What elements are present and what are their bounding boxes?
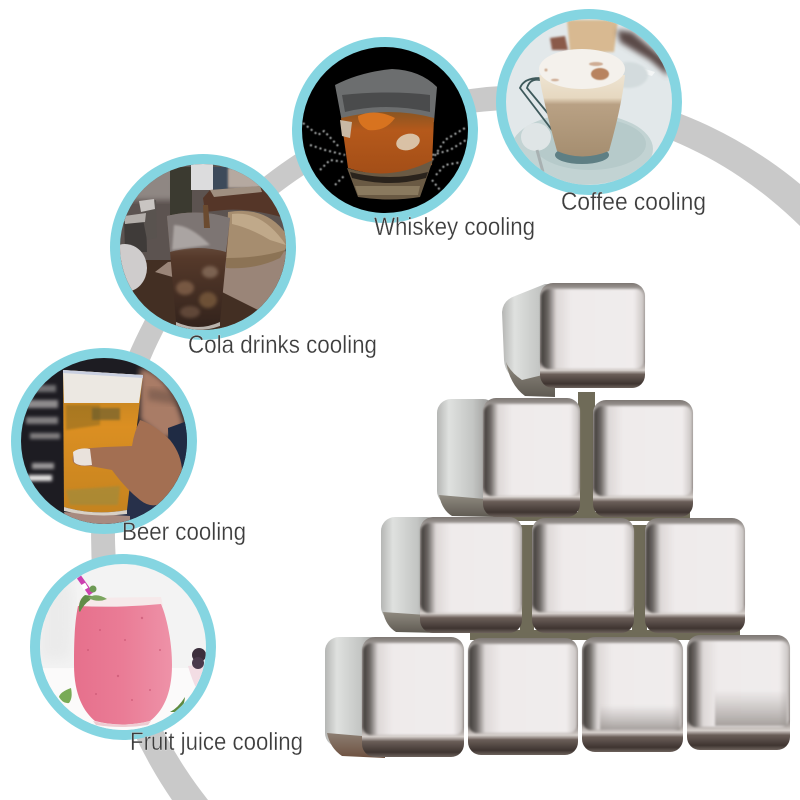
cube row 3 right [645,518,745,633]
cola glass [167,212,230,327]
photo circle: cola drinks [103,154,300,340]
background cup and items [567,20,618,52]
cup handle [520,78,555,130]
pouring bottle [203,186,280,217]
cube row 3 left [381,517,522,633]
cube row 3 middle [532,518,634,633]
pyramid of stainless steel cubes [325,283,790,758]
glass rim [78,597,163,606]
table surface [155,251,286,310]
grey connecting arc [91,85,800,800]
straw and mint [79,577,91,594]
blurred bar lights [26,385,60,481]
photo circle: whiskey [292,37,478,223]
beer glass [63,370,143,512]
man's face [140,368,184,440]
whiskey liquid [341,112,434,174]
glass upper [335,69,437,122]
salt and pepper shakers [124,214,147,252]
photo circle: beer [10,348,200,540]
cube row 2 left [437,398,580,517]
cube row 2 right [593,400,693,517]
glass badge [396,134,420,150]
label: whiskey cooling: Whiskey cooling [374,213,535,241]
label: coffee cooling: Coffee cooling [561,188,706,216]
bottles in background [170,167,192,215]
label: beer cooling: Beer cooling [122,518,246,546]
cube row 4 centre left [468,638,578,755]
label: cola drinks cooling: Cola drinks cooling [188,331,377,359]
leaf left [59,688,72,703]
glass base [347,160,433,200]
photo circle: coffee [496,9,682,195]
cinnamon [544,62,609,81]
label: fruit juice cooling: Fruit juice cooling [130,728,303,756]
photo circle: fruit juice [30,554,216,740]
spoon [521,123,551,151]
bread basket [226,210,286,258]
splashes [303,123,466,198]
saucer [511,113,653,185]
plate [120,244,147,290]
leaf right [170,697,185,712]
speckles [87,617,161,701]
foam top [539,49,625,89]
cup base [555,151,609,164]
cup body [539,75,625,156]
cube row 1 [502,283,645,397]
cube row 4 far left [325,637,464,758]
cube row 4 centre right [582,637,683,752]
hand holding glass [73,420,182,505]
berries in bowl [188,664,204,687]
gaps between cubes [470,392,740,640]
cube row 4 far right [687,635,790,750]
glass of pink smoothie [74,604,172,724]
